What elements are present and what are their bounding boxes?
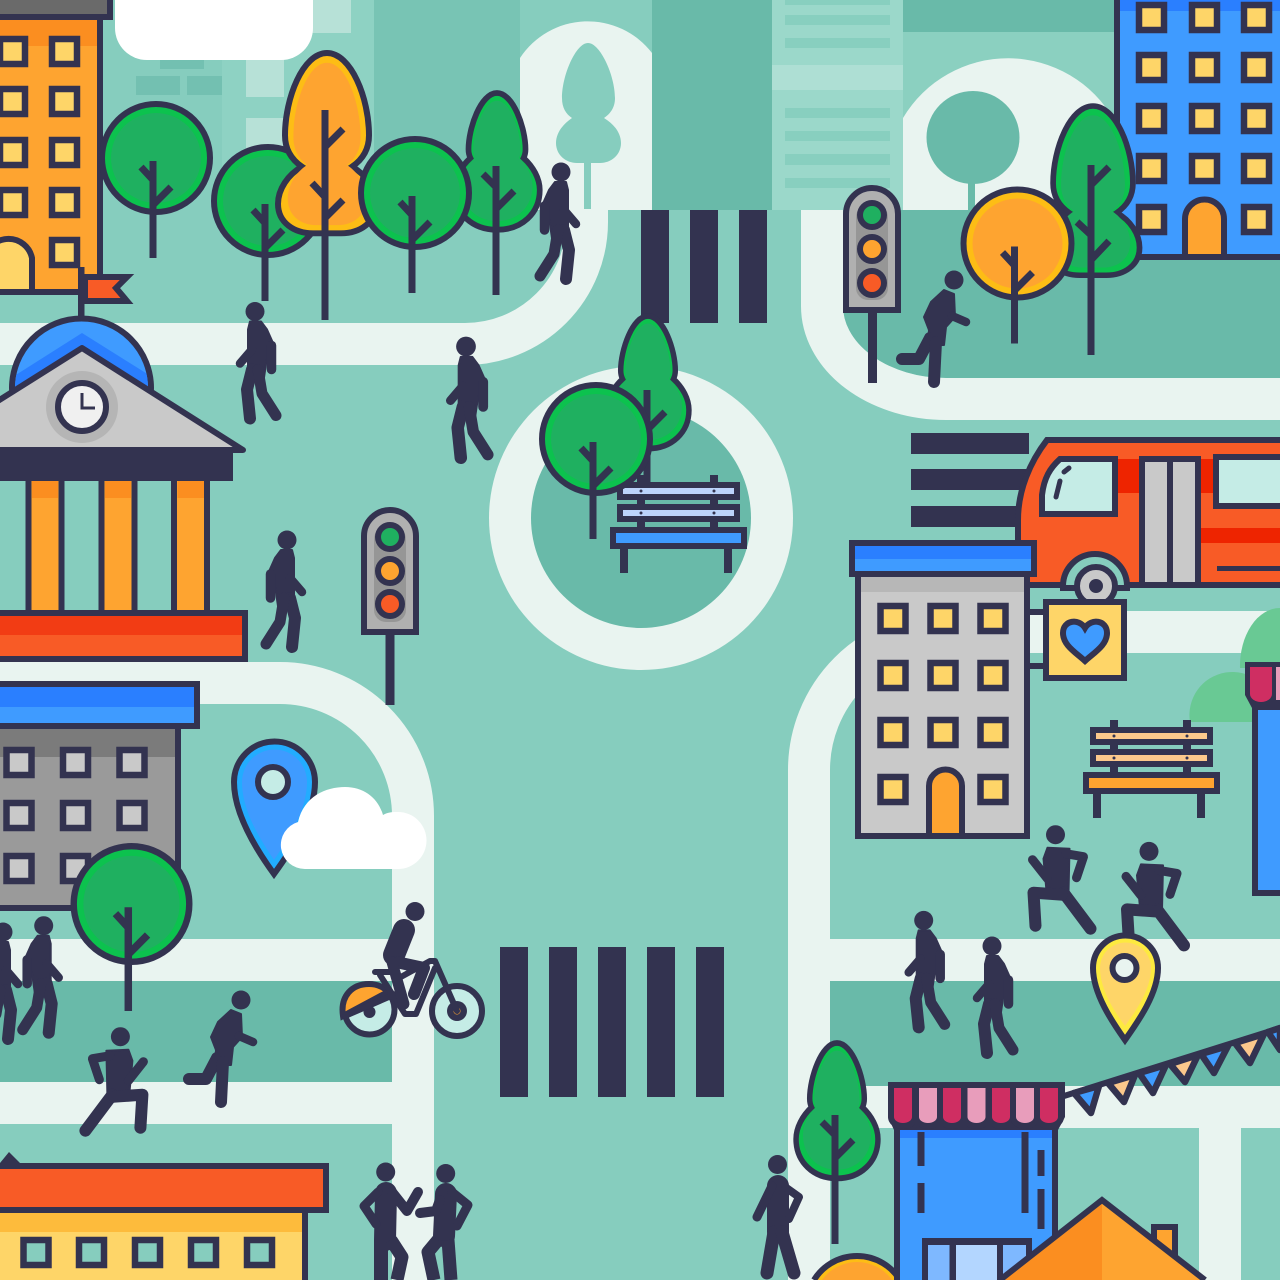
runner bottom left — [85, 1027, 143, 1131]
tree: green pear behind — [454, 93, 540, 295]
tree: pear bottom — [796, 1043, 878, 1244]
blue apartment building — [1117, 0, 1280, 257]
museum building — [0, 267, 245, 659]
bench orange — [1086, 720, 1217, 818]
tree: round green bottom left — [74, 846, 189, 1011]
runner right first — [1032, 825, 1090, 929]
orange house roof — [1000, 1200, 1205, 1280]
cyclist on bike — [343, 902, 482, 1036]
runner bottom middle — [189, 990, 253, 1102]
rider — [392, 902, 424, 1004]
gray dark building left — [0, 684, 197, 908]
museum base — [0, 613, 245, 659]
red bus — [1018, 440, 1280, 605]
tree: round green first — [102, 104, 210, 258]
background distant buildings — [136, 0, 1115, 210]
shop right edge — [1245, 662, 1280, 893]
tree: big green pear — [1046, 106, 1140, 355]
person walking left — [23, 916, 59, 1033]
bushes right — [1189, 608, 1280, 722]
location pin yellow — [1093, 936, 1158, 1040]
tree: round green third — [361, 139, 469, 293]
roundabout — [489, 366, 793, 670]
person running top right — [902, 270, 966, 382]
people walking right — [909, 911, 945, 1027]
orange round tree canopy bottom — [814, 1256, 900, 1280]
person standing bottom — [757, 1155, 799, 1273]
bus side window — [1216, 457, 1280, 506]
columns — [28, 478, 207, 614]
cloud lower — [281, 787, 426, 869]
arch with round tree silhouette — [903, 58, 1114, 210]
traffic light top — [846, 188, 898, 383]
tree: roundabout round — [542, 385, 650, 539]
location pin blue — [234, 742, 315, 874]
person walking road — [240, 302, 276, 418]
flag — [78, 267, 127, 319]
gray building right — [852, 543, 1034, 836]
person walking near museum — [266, 530, 302, 647]
bus wheel — [1063, 554, 1127, 605]
orange apartment building — [0, 0, 110, 292]
road behind gray building connectors and hanging sign — [1030, 602, 1124, 678]
tree: orange pear — [278, 53, 376, 320]
yellow building bottom left — [0, 1152, 326, 1280]
shop door — [922, 1238, 1032, 1280]
tree: round green second — [214, 147, 322, 301]
tree: roundabout pear — [607, 316, 689, 490]
park area top right — [843, 210, 1280, 378]
bike wheels — [344, 984, 482, 1036]
bench blue — [613, 475, 744, 573]
dome — [9, 316, 154, 390]
crosswalk right — [911, 433, 1029, 527]
bunting — [1064, 1028, 1280, 1113]
people walking far left — [0, 922, 18, 1039]
person right — [420, 1164, 468, 1280]
bike fender — [343, 984, 388, 1016]
bike frame — [345, 961, 457, 1016]
clock — [46, 371, 118, 443]
traffic light center — [364, 510, 416, 705]
person walking top — [540, 162, 576, 279]
shop awning — [888, 1082, 1065, 1130]
person walking right second — [977, 936, 1013, 1053]
crosswalk bottom — [500, 947, 724, 1097]
runner right second — [1126, 842, 1184, 945]
top cloud — [115, 0, 313, 60]
park strips — [0, 981, 1280, 1086]
blue shop bottom — [888, 1082, 1065, 1280]
entablature — [0, 447, 233, 481]
arch with tree silhouette — [520, 21, 652, 210]
two people talking — [364, 1162, 468, 1280]
bus door — [1142, 459, 1198, 585]
person left — [364, 1162, 418, 1280]
tree: orange round — [964, 190, 1072, 344]
pediment — [0, 348, 243, 450]
crosswalk top — [641, 210, 767, 323]
person walking road center — [450, 337, 488, 458]
bus front window — [1042, 459, 1115, 514]
